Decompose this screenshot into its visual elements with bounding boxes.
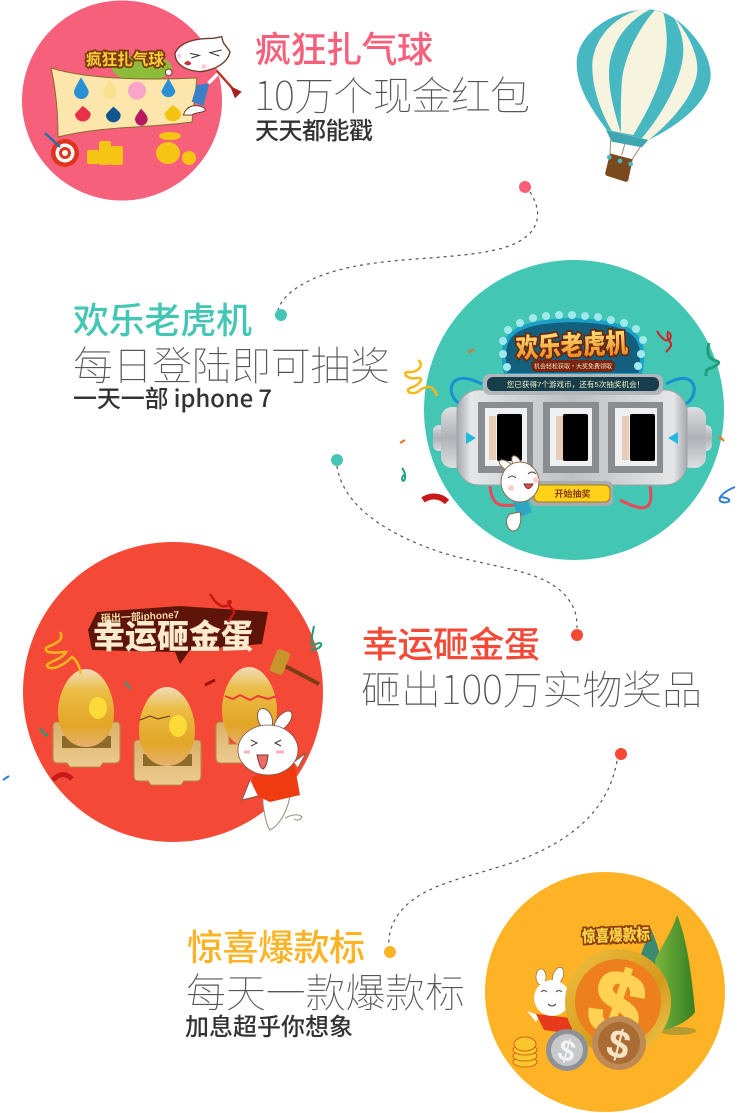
bronze coin: $ bbox=[602, 1021, 635, 1069]
target bbox=[45, 133, 79, 167]
egg confetti bbox=[3, 594, 321, 780]
section 4 text: 惊喜爆款标 bbox=[187, 927, 365, 968]
balloon illustration bbox=[577, 9, 711, 182]
route dots bbox=[275, 181, 627, 958]
coin stack bbox=[513, 1037, 537, 1067]
game title: 疯狂扎气球 bbox=[86, 50, 164, 69]
section 4 text: 加息超乎你想象 bbox=[185, 1007, 353, 1042]
silver coin bbox=[546, 1029, 588, 1071]
waving rabbit bbox=[527, 966, 572, 1034]
info bar: 您已获得7个游戏币，还有5次抽奖机会！ bbox=[507, 379, 644, 389]
section 3 text: 幸运砸金蛋 bbox=[362, 624, 540, 665]
trees bbox=[637, 915, 696, 1035]
section 2 text: 欢乐老虎机 bbox=[73, 300, 252, 341]
section 1 text bbox=[254, 29, 530, 146]
gavel bbox=[269, 648, 319, 684]
egg game title: 幸运砸金蛋 bbox=[93, 618, 253, 655]
machine body bbox=[457, 390, 687, 485]
reels bbox=[478, 402, 663, 473]
cat with dart bbox=[165, 37, 242, 115]
rabbit mascot bbox=[497, 454, 539, 531]
tree behind banner bbox=[112, 55, 172, 81]
panel: golden egg circle bbox=[3, 542, 323, 842]
money bag bbox=[156, 132, 196, 165]
egg highlights bbox=[89, 697, 187, 737]
egg game title bbox=[88, 606, 268, 664]
start button: 开始抽奖 bbox=[554, 488, 591, 499]
panel: balloon game circle bbox=[22, 0, 242, 200]
egg game title: 砸出一部iphone7 bbox=[101, 608, 180, 625]
balloons on banner bbox=[74, 77, 181, 126]
reel arrows bbox=[466, 432, 678, 444]
section 3 text: 砸出100万实物奖品 bbox=[361, 658, 702, 716]
section 2 text bbox=[73, 300, 390, 414]
section 1 text: 10万个现金红包 bbox=[254, 64, 530, 122]
marquee sign: 欢乐老虎机 bbox=[515, 328, 628, 364]
big gold coin: $ bbox=[577, 948, 657, 1061]
side caps bbox=[433, 407, 712, 468]
section 2 text: 每日登陆即可抽奖 bbox=[73, 334, 390, 392]
gold coins bbox=[87, 141, 123, 165]
section 4 text bbox=[185, 927, 465, 1042]
golden eggs bbox=[58, 667, 277, 766]
bronze coin bbox=[592, 1016, 646, 1070]
section 4 text: 每天一款爆款标 bbox=[186, 961, 465, 1019]
section 2 text: 一天一部 iphone 7 bbox=[73, 379, 272, 414]
banner bbox=[51, 68, 197, 137]
hot product title: 惊喜爆款标 bbox=[582, 925, 650, 946]
egg cracks bbox=[140, 695, 277, 720]
egg rabbit mascot bbox=[238, 706, 306, 830]
blue cables bbox=[451, 378, 694, 405]
panel: hot product circle bbox=[485, 872, 725, 1112]
marquee sign: 机会轻松获取・大奖免费领取 bbox=[534, 362, 612, 370]
info bar bbox=[483, 374, 663, 395]
start button bbox=[530, 481, 613, 506]
section 3 text bbox=[361, 624, 702, 716]
egg stands bbox=[53, 722, 254, 785]
dashed connector paths bbox=[278, 192, 617, 945]
panel: slot machine circle bbox=[400, 260, 735, 560]
section 1 text: 天天都能戳 bbox=[255, 111, 373, 146]
confetti bbox=[400, 331, 735, 502]
section 1 text: 疯狂扎气球 bbox=[255, 29, 433, 70]
silver coin: $ bbox=[554, 1033, 579, 1070]
marquee sign bbox=[499, 311, 647, 375]
